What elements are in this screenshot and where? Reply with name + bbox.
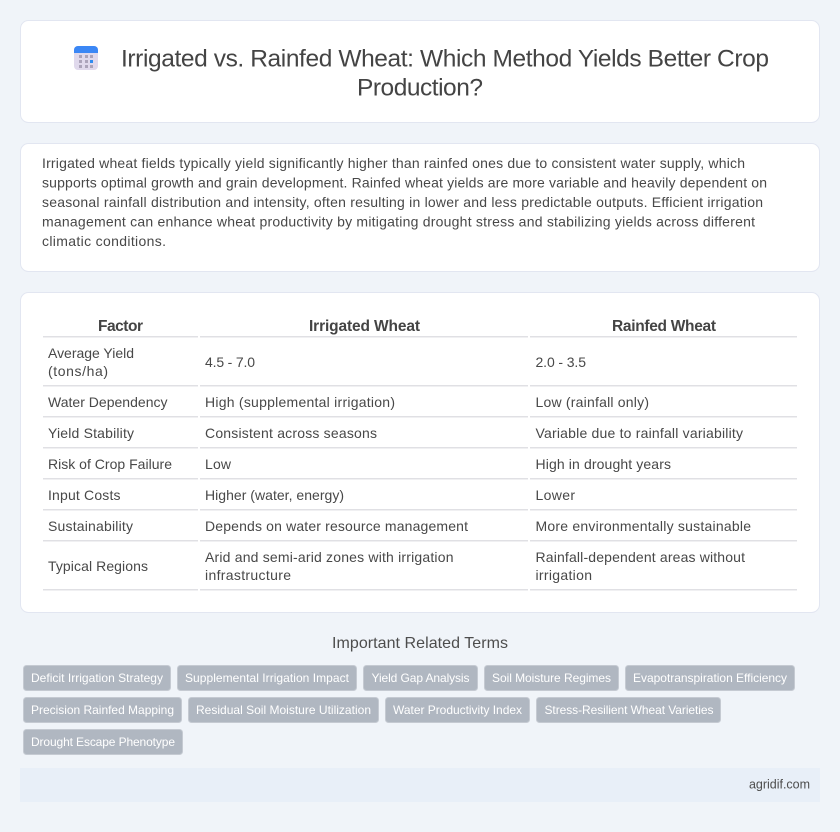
tag (484, 666, 618, 690)
text block: summary paragraph: climatic conditions. (42, 233, 166, 249)
tag: Residual Soil Moisture Utilization (196, 703, 371, 717)
title: Production? (357, 74, 483, 102)
table row: sustainability: Depends on water resource management (205, 518, 468, 534)
table row: average yield: Average Yield (48, 345, 134, 361)
table row: water dependency: High (supplemental irrigation) (205, 394, 395, 410)
table row: yield stability: Consistent across seasons (205, 425, 377, 441)
table row: water dependency (48, 394, 649, 410)
table row: risk of crop failure: Risk of Crop Failure (48, 456, 172, 472)
panel: title card (20, 20, 820, 122)
tag: Deficit Irrigation Strategy (31, 671, 163, 685)
table row: water dependency: Low (rainfall only) (536, 394, 649, 410)
table row: input costs: Input Costs (48, 487, 120, 503)
text block: summary paragraph: supports optimal growth and grain development. Rainfed wheat yields are more variable and heavily dependent on (42, 174, 767, 190)
table row: typical regions: Rainfall-dependent areas without (536, 549, 745, 565)
text block: summary paragraph: management can enhance wheat productivity by mitigating drought stress and stabilizing yields across different (42, 214, 755, 230)
table row: sustainability: More environmentally sustainable (536, 518, 751, 534)
table row: typical regions: irrigation (536, 567, 592, 583)
title (121, 46, 769, 102)
panel: comparison table card (20, 292, 820, 612)
table row: risk of crop failure: Low (205, 456, 232, 472)
footer: agridif.com (749, 778, 810, 792)
table row: input costs: Lower (536, 487, 575, 503)
title: Irrigated vs. Rainfed Wheat: Which Method Yields Better Crop (121, 46, 769, 72)
text block: summary paragraph (42, 155, 767, 249)
table row: average yield (48, 345, 586, 379)
table row: sustainability (48, 518, 751, 534)
tag: Stress-Resilient Wheat Varieties (544, 703, 714, 717)
tag (178, 666, 356, 690)
text block: summary paragraph: seasonal rainfall distribution and intensity, often resulting in lower and less predictable outputs. Efficient irrigation (42, 194, 763, 210)
tag: Supplemental Irrigation Impact (185, 671, 350, 685)
tag: Soil Moisture Regimes (492, 671, 611, 685)
table row: risk of crop failure (48, 456, 671, 472)
table row: average yield: (tons/ha) (48, 363, 108, 379)
table row: sustainability: Sustainability (48, 518, 133, 534)
tag (188, 698, 378, 722)
tag (24, 666, 170, 690)
table row: average yield: 4.5 - 7.0 (205, 354, 255, 370)
tag (386, 698, 530, 722)
tag: Water Productivity Index (393, 703, 522, 717)
tag (24, 730, 182, 754)
table row lines (43, 336, 797, 590)
tag (364, 666, 478, 690)
table row: typical regions (48, 549, 745, 583)
table row: yield stability: Variable due to rainfall variability (536, 425, 743, 441)
table row: typical regions: Typical Regions (48, 558, 148, 574)
table row: yield stability (48, 425, 743, 441)
tag: Evapotranspiration Efficiency (633, 671, 787, 685)
text block: summary paragraph: Irrigated wheat fields typically yield significantly higher than rainfed ones due to consistent water supply, which (42, 155, 745, 171)
tag (24, 698, 182, 722)
table row: average yield: 2.0 - 3.5 (536, 354, 586, 370)
table header: Factor (98, 318, 143, 335)
table row: input costs (48, 487, 575, 503)
table row: yield stability: Yield Stability (48, 425, 134, 441)
tag: Drought Escape Phenotype (31, 735, 175, 749)
tag: Yield Gap Analysis (372, 671, 470, 685)
table header: Irrigated Wheat (309, 318, 420, 335)
tag: Precision Rainfed Mapping (31, 703, 174, 717)
icon: calendar (74, 46, 98, 70)
table header: Rainfed Wheat (612, 318, 716, 335)
heading: important related terms: Important Related Terms (332, 635, 508, 652)
table row: typical regions: Arid and semi-arid zones with irrigation (205, 549, 454, 565)
tag (536, 698, 720, 722)
footer (20, 768, 820, 802)
table row: input costs: Higher (water, energy) (205, 487, 344, 503)
panel: summary card (20, 144, 820, 272)
table row: risk of crop failure: High in drought years (536, 456, 671, 472)
tags: related terms (24, 666, 794, 754)
table header (98, 318, 716, 335)
tag (626, 666, 794, 690)
table row: typical regions: infrastructure (205, 567, 291, 583)
table row: water dependency: Water Dependency (48, 394, 168, 410)
